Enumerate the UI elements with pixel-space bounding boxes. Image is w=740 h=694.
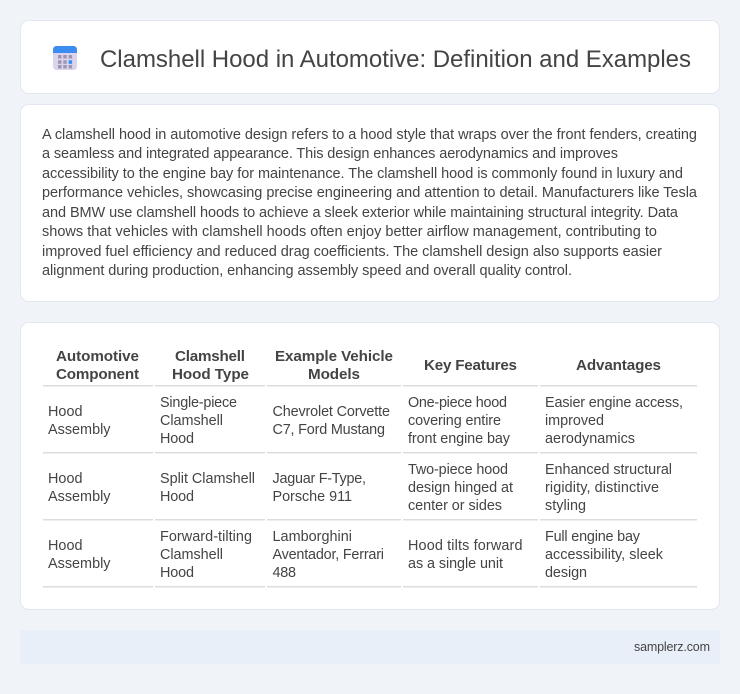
text block: description paragraph: accessibility to the engine bay for maintenance. The clamshell hood is commonly found in luxury and — [42, 166, 683, 182]
table header row: Example Vehicle — [275, 348, 393, 365]
table header row: Component — [56, 366, 139, 383]
table row: split — [48, 462, 672, 514]
table row: forward-tilting: Aventador, Ferrari — [272, 547, 384, 563]
text block: description paragraph: a seamless and integrated appearance. This design enhances aerodynamics and improves — [42, 146, 618, 162]
footer bar — [20, 630, 720, 664]
footer source text: samplerz.com — [634, 640, 710, 654]
table row: single-piece: Easier engine access, — [545, 395, 683, 411]
table header row: Models — [308, 366, 360, 383]
table row: single-piece: Hood — [48, 404, 82, 420]
text block: description paragraph: shows that vehicles with clamshell hoods often enjoy better airflow management, contributing to — [42, 224, 657, 240]
text block: description paragraph: performance vehicles, showcasing precise engineering and attention to detail. Manufacturers like Tesla — [42, 185, 698, 201]
table row: forward-tilting: as a single unit — [408, 556, 503, 572]
table row: single-piece: One-piece hood — [408, 395, 507, 411]
table row: single-piece: covering entire — [408, 413, 501, 429]
table header row: Clamshell — [175, 348, 245, 365]
text block: description paragraph — [42, 127, 698, 279]
text block: description paragraph: A clamshell hood in automotive design refers to a hood style that wraps over the front fenders, creating — [42, 127, 697, 143]
table row: single-piece: improved — [545, 413, 604, 429]
table header row — [56, 348, 661, 383]
table row: forward-tilting: Hood — [160, 565, 194, 581]
table header row: Key Features — [424, 357, 517, 374]
table row: single-piece: aerodynamics — [545, 431, 635, 447]
panel: description — [20, 104, 720, 302]
text block: description paragraph: alignment during production, enhancing assembly speed and overall quality control. — [42, 263, 572, 279]
table row: split: Hood — [160, 489, 194, 505]
table row: split: center or sides — [408, 498, 502, 514]
table row: forward-tilting: Hood — [48, 538, 82, 554]
table row: split: Porsche 911 — [272, 489, 352, 505]
table row: single-piece: Assembly — [48, 422, 111, 438]
table row: split: Two-piece hood — [408, 462, 508, 478]
table row: forward-tilting: Lamborghini — [272, 529, 352, 545]
table row: single-piece: Hood — [160, 431, 194, 447]
table row: single-piece: C7, Ford Mustang — [272, 422, 385, 438]
table row: forward-tilting: 488 — [272, 565, 296, 581]
table rules — [43, 385, 697, 588]
table row: single-piece: Clamshell — [160, 413, 223, 429]
icon: calendar — [53, 46, 77, 70]
table row: split: Enhanced structural — [545, 462, 672, 478]
table row: split: Split Clamshell — [160, 471, 255, 487]
table row: single-piece: front engine bay — [408, 431, 511, 447]
table row: single-piece: Chevrolet Corvette — [272, 404, 390, 420]
table row: single-piece: Single-piece — [160, 395, 237, 411]
table row: split: design hinged at — [408, 480, 513, 496]
table row: split: rigidity, distinctive — [545, 480, 659, 496]
table row: forward-tilting: Forward-tilting — [160, 529, 252, 545]
table row: single-piece — [48, 395, 683, 447]
table header row: Automotive — [56, 348, 139, 365]
text block: description paragraph: and BMW use clamshell hoods to achieve a sleek exterior while maintaining structural integrity. Data — [42, 205, 679, 221]
title: Clamshell Hood in Automotive: Definition and Examples — [100, 46, 691, 73]
table row: forward-tilting: Assembly — [48, 556, 111, 572]
table row: split: Hood — [48, 471, 82, 487]
table row: split: Assembly — [48, 489, 111, 505]
table row: forward-tilting: Clamshell — [160, 547, 223, 563]
table row: forward-tilting: accessibility, sleek — [545, 547, 664, 563]
table row: forward-tilting: design — [545, 565, 587, 581]
panel: header — [20, 20, 720, 94]
table row: forward-tilting — [48, 529, 664, 581]
table header row: Hood Type — [172, 366, 249, 383]
table row: split: Jaguar F-Type, — [272, 471, 366, 487]
table row: forward-tilting: Hood tilts forward — [408, 538, 522, 554]
table header row: Advantages — [576, 357, 661, 374]
table row: forward-tilting: Full engine bay — [545, 529, 641, 545]
text block: description paragraph: improved fuel efficiency and reduced drag coefficients. The clamshell design also supports easier — [42, 244, 662, 260]
table row: split: styling — [545, 498, 586, 514]
panel: comparison table — [20, 322, 720, 610]
